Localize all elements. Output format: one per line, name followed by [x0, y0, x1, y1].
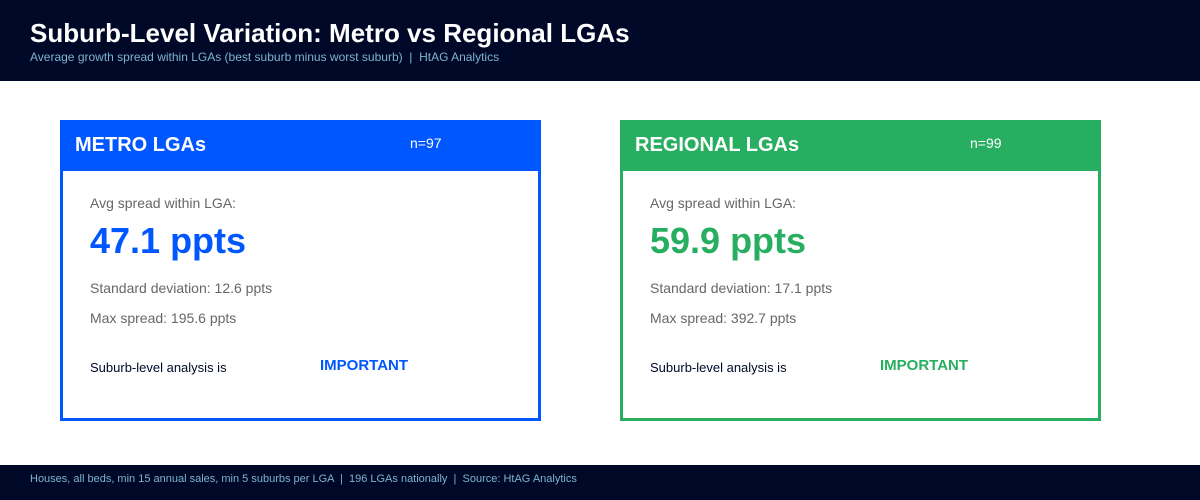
regional sample size: n=99 — [970, 135, 1002, 151]
metro conclusion emphasis: IMPORTANT — [320, 357, 408, 374]
regional conclusion emphasis: IMPORTANT — [880, 357, 968, 374]
metro heading: METRO LGAs — [75, 134, 206, 156]
panel: metro LGAs — [60, 120, 541, 421]
footer banner — [0, 465, 1200, 500]
regional max spread: Max spread: 392.7 ppts — [650, 310, 796, 326]
metro header bar — [60, 120, 541, 171]
metro spread label: Avg spread within LGA: — [90, 195, 236, 211]
metro sample size: n=97 — [410, 135, 442, 151]
regional spread value: 59.9 ppts — [650, 220, 806, 261]
footer note: Houses, all beds, min 15 annual sales, min 5 suburbs per LGA | 196 LGAs nationally | Source: HtAG Analytics — [30, 473, 577, 485]
regional spread label: Avg spread within LGA: — [650, 195, 796, 211]
panel: regional LGAs — [620, 120, 1101, 421]
regional standard deviation: Standard deviation: 17.1 ppts — [650, 280, 832, 296]
metro conclusion text: Suburb-level analysis is — [90, 360, 227, 375]
title: Suburb-Level Variation: Metro vs Regional LGAs — [30, 18, 630, 48]
regional heading: REGIONAL LGAs — [635, 134, 799, 156]
metro standard deviation: Standard deviation: 12.6 ppts — [90, 280, 272, 296]
header banner — [0, 0, 1200, 81]
metro max spread: Max spread: 195.6 ppts — [90, 310, 236, 326]
subtitle: Average growth spread within LGAs (best suburb minus worst suburb) | HtAG Analytics — [30, 50, 499, 64]
regional header bar — [620, 120, 1101, 171]
regional conclusion text: Suburb-level analysis is — [650, 360, 787, 375]
metro spread value: 47.1 ppts — [90, 220, 246, 261]
